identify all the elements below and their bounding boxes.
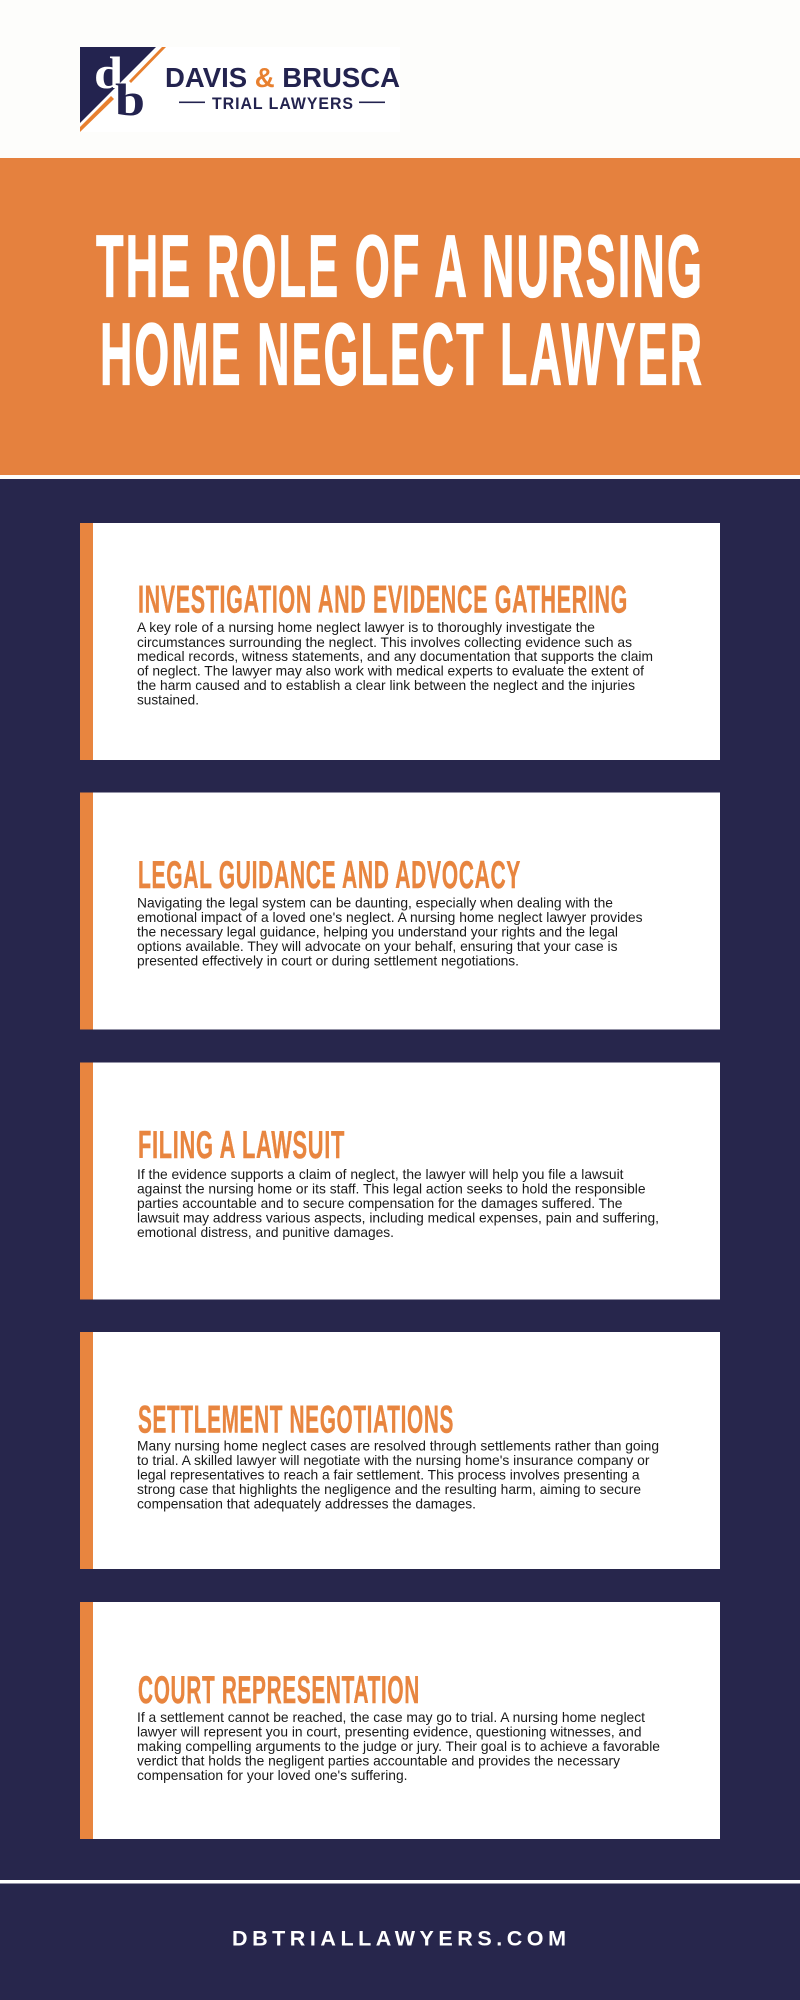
panel: settlement negotiations bbox=[80, 1332, 720, 1569]
body text bbox=[137, 1166, 659, 1240]
body text: emotional impact of a loved one's neglect. A nursing home neglect lawyer provides bbox=[137, 909, 642, 925]
logo: Davis & Brusca Trial Lawyers bbox=[80, 47, 400, 132]
body text: If the evidence supports a claim of neglect, the lawyer will help you file a lawsuit bbox=[137, 1166, 624, 1182]
body text bbox=[137, 1709, 660, 1783]
body text: of neglect. The lawyer may also work with medical experts to evaluate the extent of bbox=[137, 662, 644, 678]
heading: SETTLEMENT NEGOTIATIONS bbox=[138, 1398, 454, 1442]
panel: filing a lawsuit bbox=[80, 1062, 720, 1300]
main navy panel bbox=[0, 479, 800, 2000]
body text: to trial. A skilled lawyer will negotiate with the nursing home's insurance company or bbox=[137, 1452, 650, 1468]
icon: navy triangle with db monogram bbox=[80, 47, 166, 132]
body text: the harm caused and to establish a clear link between the neglect and the injuries bbox=[137, 677, 635, 693]
body text bbox=[137, 619, 653, 708]
panel: court representation bbox=[80, 1602, 720, 1839]
footer divider bbox=[0, 1880, 800, 1884]
body text: Navigating the legal system can be daunting, especially when dealing with the bbox=[137, 894, 613, 910]
title bbox=[96, 216, 704, 404]
body text: against the nursing home or its staff. This legal action seeks to hold the responsible bbox=[137, 1180, 646, 1196]
body text: compensation that adequately addresses the damages. bbox=[137, 1496, 476, 1512]
body text: circumstances surrounding the neglect. This involves collecting evidence such as bbox=[137, 634, 632, 650]
panel: legal guidance and advocacy bbox=[80, 792, 720, 1030]
body text: strong case that highlights the negligence and the resulting harm, aiming to secure bbox=[137, 1481, 641, 1497]
icon: navy triangle with db monogram: b bbox=[115, 74, 145, 125]
body text bbox=[137, 1438, 659, 1512]
body text: verdict that holds the negligent parties accountable and provides the necessary bbox=[137, 1752, 620, 1768]
body text: emotional distress, and punitive damages. bbox=[137, 1224, 394, 1240]
body text: lawyer will represent you in court, presenting evidence, questioning witnesses, and bbox=[137, 1724, 642, 1740]
body text: sustained. bbox=[137, 692, 199, 708]
heading: FILING A LAWSUIT bbox=[138, 1124, 345, 1167]
body text: legal representatives to reach a fair settlement. This process involves presenting a bbox=[137, 1466, 640, 1482]
icon: navy triangle with db monogram: d bbox=[94, 47, 123, 98]
footer website: DBTRIALLAWYERS.COM bbox=[232, 1926, 566, 1950]
logo tagline: TRIAL LAWYERS bbox=[212, 95, 354, 113]
body text: If a settlement cannot be reached, the case may go to trial. A nursing home neglect bbox=[137, 1709, 645, 1725]
body text bbox=[137, 894, 642, 968]
body text: making compelling arguments to the judge or jury. Their goal is to achieve a favorable bbox=[137, 1738, 660, 1754]
body text: medical records, witness statements, and any documentation that supports the claim bbox=[137, 648, 653, 664]
logo wordmark: DAVIS & BRUSCA bbox=[165, 62, 400, 93]
body text: A key role of a nursing home neglect lawyer is to thoroughly investigate the bbox=[137, 619, 595, 635]
panel: investigation and evidence gathering bbox=[80, 523, 720, 760]
body text: the necessary legal guidance, helping you understand your rights and the legal bbox=[137, 924, 618, 940]
body text: compensation for your loved one's suffering. bbox=[137, 1767, 408, 1783]
body text: lawsuit may address various aspects, including medical expenses, pain and suffering, bbox=[137, 1210, 659, 1226]
body text: parties accountable and to secure compensation for the damages suffered. The bbox=[137, 1195, 623, 1211]
body text: options available. They will advocate on your behalf, ensuring that your case is bbox=[137, 938, 618, 954]
body text: Many nursing home neglect cases are resolved through settlements rather than going bbox=[137, 1438, 659, 1454]
heading: COURT REPRESENTATION bbox=[138, 1669, 420, 1712]
body text: presented effectively in court or during settlement negotiations. bbox=[137, 952, 519, 968]
title banner bbox=[0, 158, 800, 475]
